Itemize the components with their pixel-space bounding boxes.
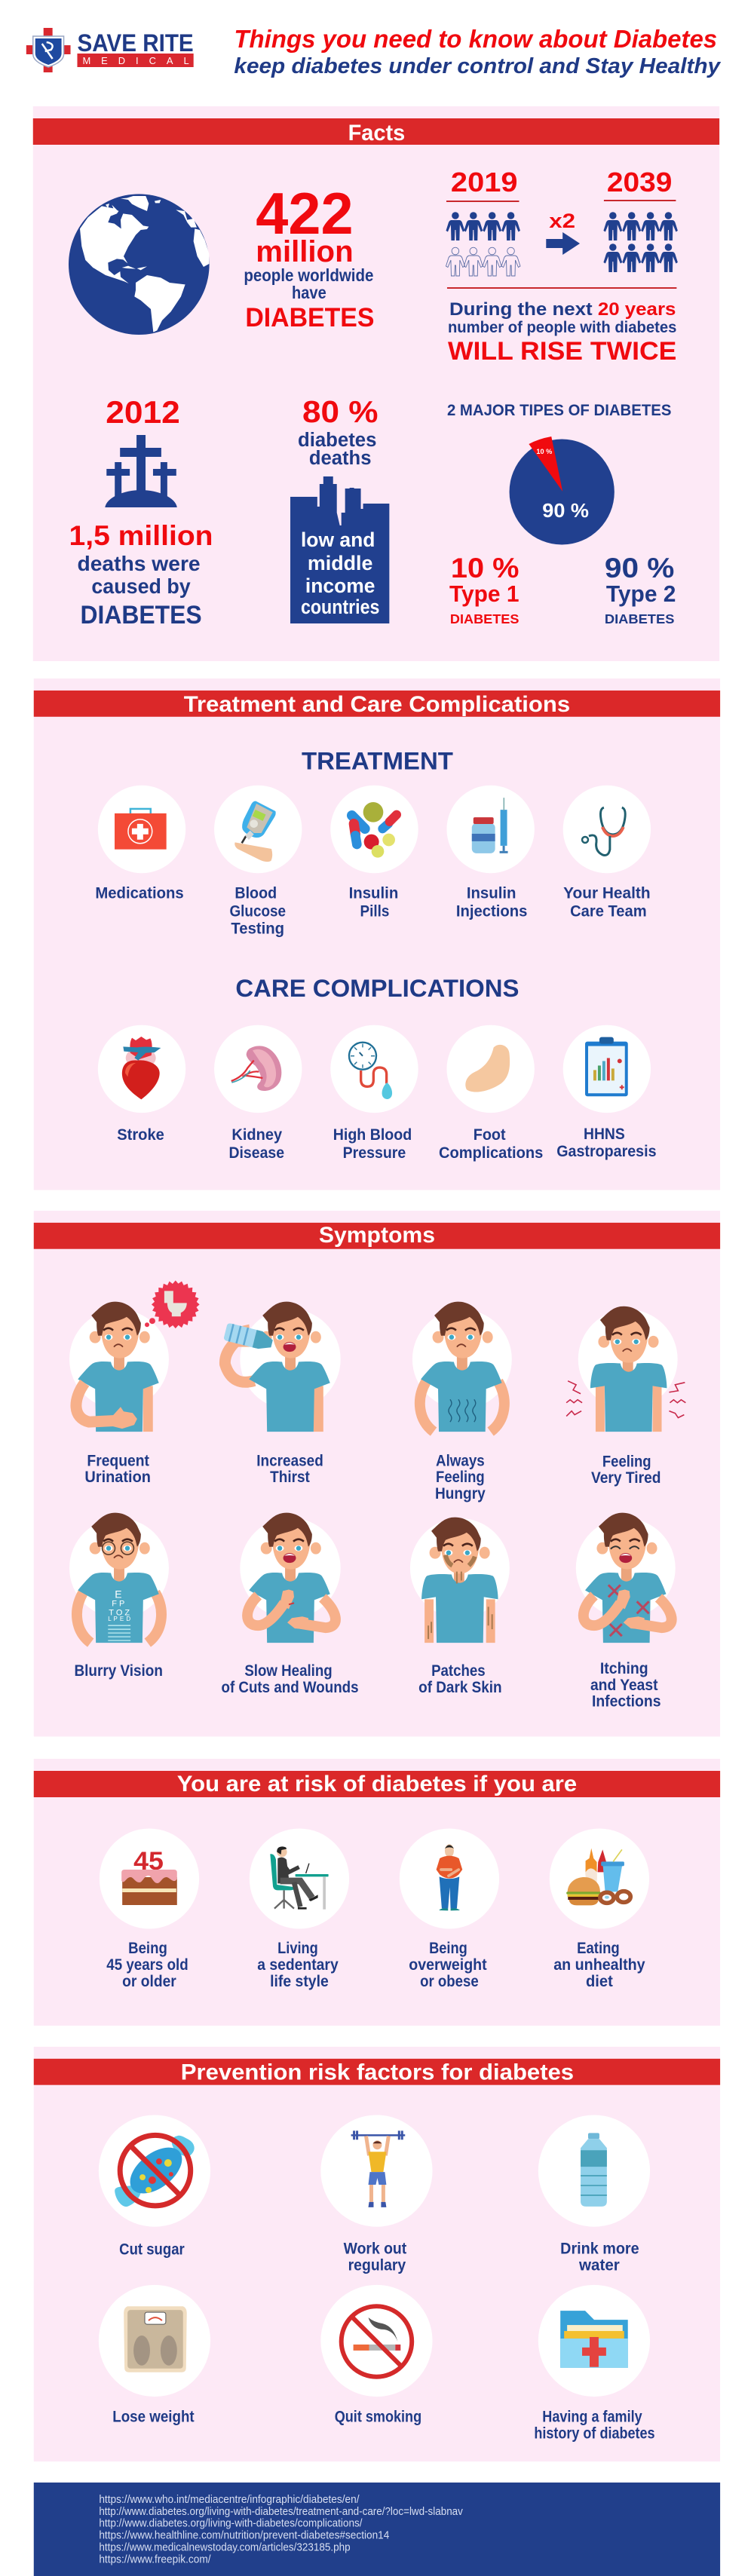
label: work out: regulary — [348, 2256, 406, 2274]
arrow — [546, 232, 580, 255]
footer: sources: http://www.diabetes.org/living-with-diabetes/complications/ — [99, 2517, 363, 2530]
label: your health care team: Your Health — [563, 885, 651, 902]
symptom: itching and yeast infections: and Yeast — [590, 1677, 658, 1694]
brand name: SAVE RITE — [77, 29, 194, 57]
section heading: symptoms — [34, 1223, 720, 1249]
icon: medications — [115, 809, 167, 850]
label: unhealthy diet: Eating — [577, 1940, 620, 1957]
symptom: blurry vision: F P — [112, 1599, 124, 1608]
heading: treatment: TREATMENT — [302, 746, 453, 774]
symptom: blurry vision: E — [115, 1588, 122, 1600]
chart: types of diabetes: 2 MAJOR TIPES OF DIABETES — [447, 402, 671, 419]
icon: no smoking — [342, 2306, 412, 2377]
icon: cake — [121, 1847, 177, 1905]
label: kidney disease — [228, 1126, 284, 1162]
icon: blood glucose testing — [234, 801, 276, 862]
label: overweight: overweight — [409, 1956, 487, 1974]
label: insulin pills: Pills — [360, 902, 389, 920]
icon: water bottle — [581, 2133, 607, 2207]
stat: 80 percent: deaths — [309, 448, 371, 469]
label: kidney disease: Disease — [228, 1144, 284, 1162]
stat: 2012 deaths: 1,5 million — [69, 520, 213, 551]
stat: 422 million: people worldwide — [244, 265, 373, 285]
label: high blood pressure: Pressure — [343, 1144, 406, 1162]
label: cut sugar: Cut sugar — [119, 2241, 185, 2259]
label: insulin injections — [456, 885, 527, 920]
icon: medical folder — [560, 2311, 628, 2368]
label: blood glucose testing: Blood — [234, 885, 277, 902]
label: hhns gastroparesis: Gastroparesis — [556, 1143, 657, 1160]
symptom: frequent urination: Urination — [84, 1469, 151, 1486]
label: lose weight: Lose weight — [112, 2408, 195, 2425]
symptom: blurry vision: L P E D — [108, 1616, 130, 1622]
label: sedentary: life style — [270, 1973, 329, 1990]
label: stroke: Stroke — [117, 1126, 164, 1144]
stat: 2012 deaths: caused by — [91, 574, 191, 598]
label: overweight: or obese — [420, 1973, 479, 1990]
label: family history: history of diabetes — [534, 2424, 655, 2442]
label: work out — [344, 2241, 406, 2274]
stat: 2012 deaths: deaths were — [77, 552, 201, 575]
icon: insulin injections — [472, 798, 508, 853]
label: blood glucose testing: Glucose — [229, 902, 286, 920]
stat: 2012 deaths — [69, 394, 213, 629]
chart: types of diabetes: DIABETES — [450, 611, 519, 626]
label: being 45 — [106, 1940, 188, 1990]
section heading: facts — [33, 118, 719, 145]
pie chart: 10 % — [536, 448, 552, 455]
section heading: symptoms: Symptoms — [319, 1223, 435, 1248]
symptom: always feeling hungry: Hungry — [435, 1485, 486, 1502]
label: blood glucose testing: Testing — [231, 920, 284, 937]
label: your health care team — [563, 885, 651, 920]
label: sedentary: a sedentary — [257, 1956, 339, 1974]
symptom: increased thirst: Increased — [256, 1452, 323, 1469]
panel: treatment and care complications — [34, 678, 720, 1190]
label: insulin injections: Injections — [456, 902, 527, 920]
icon: shield and cross — [26, 28, 71, 72]
symptom: patches of dark skin — [418, 1518, 502, 1696]
label: overweight — [409, 1940, 487, 1990]
icon: insulin pills — [352, 802, 397, 858]
label: hhns gastroparesis: HHNS — [584, 1126, 625, 1143]
icon: bathroom scale — [124, 2306, 187, 2372]
label: sedentary — [257, 1940, 339, 1990]
stat: 422 million — [244, 182, 374, 332]
icon: heart — [122, 1037, 161, 1099]
panel: symptoms — [34, 1211, 720, 1736]
stat: 80 percent: income — [305, 574, 375, 597]
icon: overweight man — [437, 1844, 462, 1910]
panel: risk factors — [34, 1759, 720, 2026]
label: kidney disease: Kidney — [231, 1126, 282, 1144]
stat: 80 percent — [290, 394, 389, 623]
stat: 422 million: 422 — [256, 182, 354, 247]
symptom: feeling very tired: Feeling — [602, 1453, 651, 1470]
heading: care complications: CARE COMPLICATIONS — [235, 974, 519, 1002]
stat: 80 percent: 80 % — [302, 394, 378, 429]
symptom: itching and yeast infections: Itching — [600, 1660, 648, 1677]
icon: clipboard chart — [585, 1037, 628, 1096]
section heading: prevention: Prevention risk factors for diabetes — [181, 2060, 574, 2085]
label: drink more water — [560, 2241, 639, 2274]
icon: stethoscope — [582, 807, 625, 856]
icon: sedentary man at desk — [270, 1846, 329, 1910]
stat: 422 million: DIABETES — [245, 303, 374, 332]
label: drink more water: Drink more — [560, 2241, 639, 2258]
chart: 2019 to 2039 people: x2 — [549, 210, 575, 232]
chart: types of diabetes: DIABETES — [605, 611, 674, 626]
title: keep diabetes under control and Stay Healthy — [234, 54, 722, 78]
footer: sources: http://www.diabetes.org/living-with-diabetes/treatment-and-care/?loc=lwd-slabnav — [99, 2505, 463, 2518]
chart: 2019 to 2039 people — [446, 167, 678, 366]
symptom: itching and yeast infections: Infections — [592, 1693, 661, 1711]
label: work out: Work out — [344, 2241, 406, 2258]
symptom: blurry vision: Blurry Vision — [74, 1662, 163, 1680]
icon: high blood pressure — [349, 1043, 392, 1099]
chart: 2019 to 2039 people: 2019 — [451, 167, 517, 198]
stat: 2012 deaths: DIABETES — [80, 601, 202, 629]
symptom: blurry vision: T O Z — [109, 1608, 130, 1617]
stat: 80 percent: diabetes — [298, 430, 376, 451]
label: insulin pills: Insulin — [349, 885, 398, 902]
stat: 422 million: have — [292, 283, 326, 302]
footer: sources: https://www.who.int/mediacentre/infographic/diabetes/en/ — [99, 2493, 360, 2506]
symptom: blurry vision — [74, 1513, 163, 1680]
icon: foot — [465, 1045, 510, 1092]
footer: sources: https://www.medicalnewstoday.com/articles/323185.php — [99, 2541, 351, 2554]
symptom: patches of dark skin: Patches — [431, 1662, 486, 1680]
label: being 45: Being — [128, 1940, 167, 1957]
icon: kidney — [231, 1046, 281, 1091]
label: high blood pressure — [333, 1126, 412, 1162]
section heading: prevention — [34, 2059, 720, 2085]
label: insulin injections: Insulin — [467, 885, 516, 902]
symptom: slow healing of cuts and wounds — [221, 1513, 359, 1696]
label: foot complications: Complications — [439, 1144, 543, 1162]
stat: 80 percent: countries — [301, 596, 379, 618]
label: insulin pills — [349, 885, 398, 920]
panel: prevention — [34, 2047, 720, 2461]
symptom: always feeling hungry: Always — [436, 1452, 485, 1469]
symptom: patches of dark skin: of Dark Skin — [418, 1679, 502, 1696]
label: your health care team: Care Team — [570, 902, 647, 920]
label: medications: Medications — [95, 885, 184, 902]
label: being 45: 45 years old — [106, 1956, 188, 1974]
icon: unhealthy food — [566, 1849, 630, 1905]
symptom: frequent urination — [76, 1275, 205, 1486]
label: hhns gastroparesis — [556, 1126, 657, 1160]
symptom: slow healing of cuts and wounds: Slow Healing — [244, 1662, 333, 1680]
label: unhealthy diet — [553, 1940, 645, 1990]
footer: sources — [34, 2483, 720, 2576]
section heading: risk — [34, 1771, 720, 1797]
label: being 45: or older — [122, 1973, 176, 1990]
label: family history — [534, 2408, 655, 2442]
stat: 80 percent: low and — [301, 528, 375, 551]
symptom: feeling very tired: Very Tired — [591, 1469, 661, 1487]
section heading: facts: Facts — [348, 121, 405, 145]
section heading: treatment and care complications: Treatment and Care Complications — [184, 692, 570, 717]
symptom: increased thirst: Thirst — [270, 1469, 310, 1486]
icon: globe — [69, 194, 210, 335]
symptom: always feeling hungry: Feeling — [436, 1469, 485, 1486]
symptom: increased thirst — [223, 1302, 330, 1486]
footer: sources: https://www.freepik.com/ — [99, 2553, 211, 2565]
label: drink more water: water — [578, 2256, 620, 2274]
label: unhealthy diet: an unhealthy — [553, 1956, 645, 1974]
symptom: itching and yeast infections — [584, 1513, 672, 1711]
chart: types of diabetes: 10 % — [451, 553, 519, 584]
chart: 2019 to 2039 people: 2039 — [607, 167, 672, 198]
label: family history: Having a family — [542, 2408, 642, 2425]
symptom: feeling very tired — [566, 1306, 685, 1487]
label: unhealthy diet: diet — [586, 1973, 613, 1990]
label: overweight: Being — [429, 1940, 467, 1957]
label: blood glucose testing — [229, 885, 286, 937]
symptom: frequent urination: Frequent — [87, 1452, 149, 1469]
chart: 2019 to 2039 people: number of people with diabetes — [448, 319, 676, 336]
footer: sources: https://www.healthline.com/nutrition/prevent-diabetes#section14 — [99, 2529, 389, 2542]
title — [234, 25, 722, 78]
icon: crosses — [105, 435, 177, 507]
stat: 2012 deaths: 2012 — [106, 394, 180, 430]
pie chart — [510, 436, 615, 544]
chart: types of diabetes — [447, 402, 676, 626]
chart: types of diabetes: Type 2 — [606, 580, 676, 607]
section heading: risk: You are at risk of diabetes if you are — [177, 1772, 577, 1796]
chart: 2019 to 2039 people: WILL RISE TWICE — [448, 337, 676, 366]
chart: 2019 to 2039 people: During the next 20 years — [449, 299, 676, 320]
panel: facts — [33, 106, 719, 661]
label: sedentary: Living — [277, 1940, 318, 1957]
title: Things you need to know about Diabetes — [234, 25, 717, 53]
icon: weightlifter — [351, 2130, 405, 2207]
stat: 422 million: million — [256, 235, 354, 268]
label: foot complications: Foot — [474, 1126, 506, 1144]
label: high blood pressure: High Blood — [333, 1126, 412, 1144]
label: foot complications — [439, 1126, 543, 1162]
symptom: always feeling hungry — [420, 1302, 504, 1502]
label: quit smoking: Quit smoking — [335, 2408, 421, 2425]
logo — [26, 28, 194, 72]
icon: no candy — [115, 2135, 195, 2207]
chart: types of diabetes: 90 % — [605, 553, 674, 584]
brand subtitle: MEDICAL — [82, 55, 189, 66]
icon: cake: 45 — [133, 1847, 164, 1876]
stat: 80 percent: middle — [308, 552, 372, 574]
icon: city skyline — [290, 476, 389, 623]
chart: types of diabetes: Type 1 — [449, 580, 519, 607]
symptom: slow healing of cuts and wounds: of Cuts and Wounds — [221, 1679, 359, 1696]
pie chart: 90 % — [542, 501, 589, 522]
section heading: treatment and care complications — [34, 691, 720, 717]
